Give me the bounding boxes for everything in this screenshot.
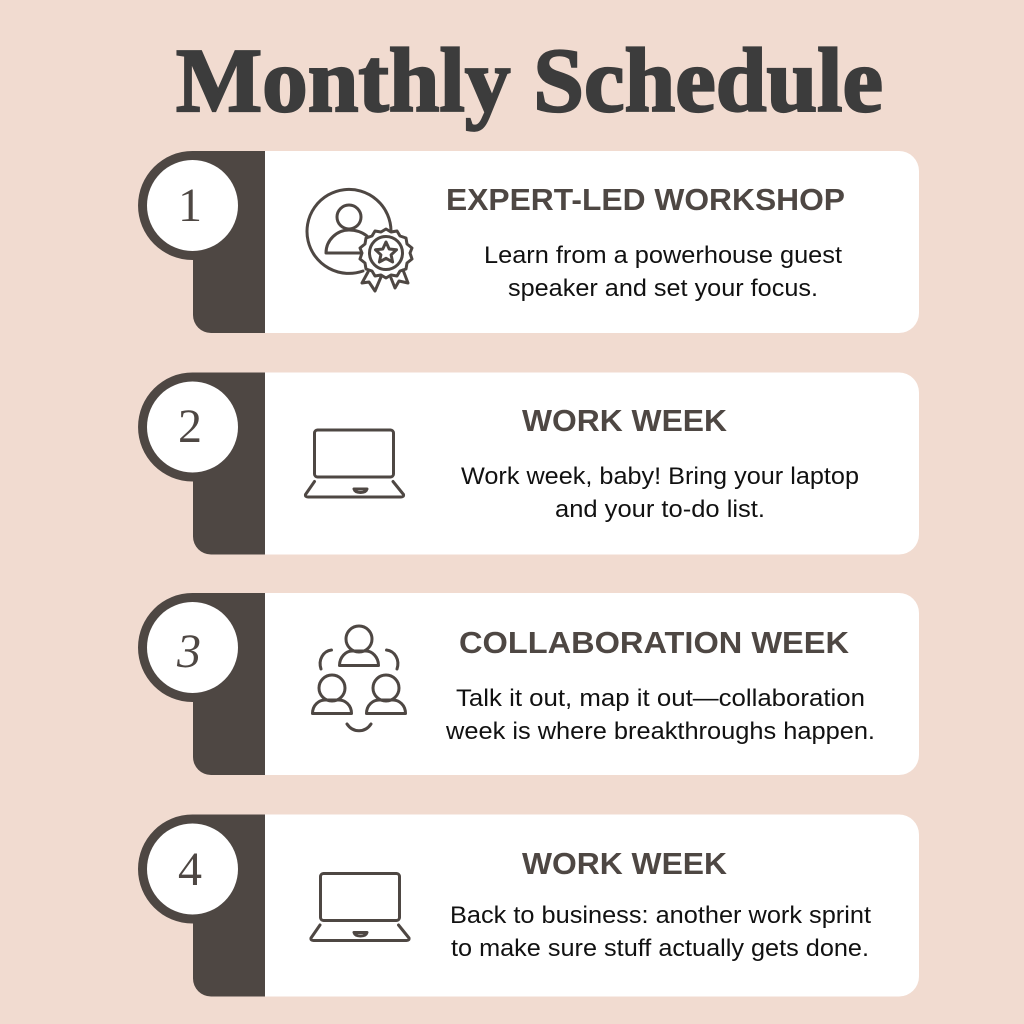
heading: step 2: WORK WEEK [522, 403, 728, 438]
card: step 2 [265, 372, 919, 554]
icon: laptop [305, 430, 404, 497]
number tab: step 4 [138, 814, 265, 996]
panel: step 1 [138, 151, 919, 333]
number badge: 3 [147, 602, 238, 693]
description: step 1: speaker and set your focus. [508, 275, 818, 302]
card: step 4 [265, 814, 919, 996]
panel: step 3 [138, 593, 919, 775]
icon: expert with award rosette [307, 189, 412, 291]
description: step 1: Learn from a powerhouse guest [484, 242, 842, 269]
number badge: 1: 1 [178, 179, 202, 232]
number badge: 3: 3 [176, 625, 201, 678]
description: step 2: Work week, baby! Bring your laptop [461, 463, 859, 490]
card: step 3 [265, 593, 919, 775]
panel: step 2 [138, 372, 919, 554]
number badge: 1 [147, 160, 238, 251]
number badge: 4 [147, 824, 238, 914]
description: step 3: week is where breakthroughs happen. [445, 718, 875, 745]
heading: step 3: COLLABORATION WEEK [459, 625, 850, 660]
card: step 1 [265, 151, 919, 333]
panel: step 4 [138, 814, 919, 996]
number tab: step 3 [138, 593, 265, 775]
description: step 4: Back to business: another work sprint [450, 902, 871, 929]
icon: laptop [311, 874, 409, 940]
number tab: step 1 [138, 151, 265, 333]
description: step 4: to make sure stuff actually gets done. [451, 935, 869, 962]
title: Monthly Schedule [176, 30, 883, 131]
icon: collaboration group [312, 626, 406, 731]
description: step 3: Talk it out, map it out—collaboration [456, 685, 865, 712]
heading: step 1: EXPERT-LED WORKSHOP [446, 182, 845, 217]
number badge: 4: 4 [178, 843, 202, 896]
heading: step 4: WORK WEEK [522, 846, 728, 881]
description: step 2: and your to-do list. [555, 496, 765, 523]
number badge: 2: 2 [178, 400, 202, 453]
number tab: step 2 [138, 372, 265, 554]
number badge: 2 [147, 382, 238, 472]
